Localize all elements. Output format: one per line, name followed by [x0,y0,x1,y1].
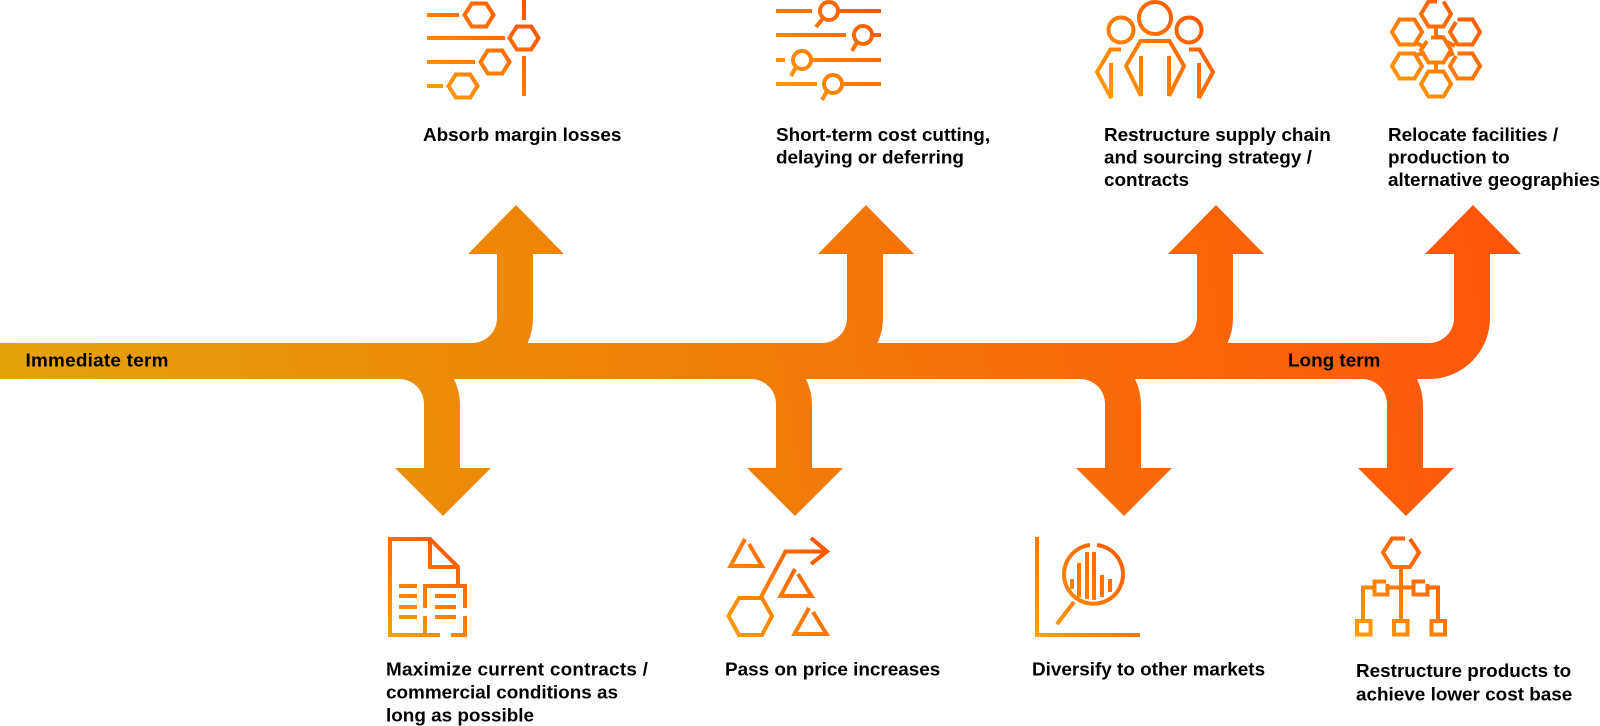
icon: triangles, hexagon and arrow [728,538,827,635]
icon: hexagon cluster [1392,2,1480,96]
strategy: maximize current contracts [386,539,649,726]
text: restructure products: achieve lower cost base [1356,684,1572,706]
icon: document [390,539,465,635]
icon: hexagon sliders [427,0,538,98]
text: maximize current contracts: Maximize current contracts / [386,660,649,680]
text: relocate facilities: Relocate facilities / [1388,125,1558,146]
timeline band with branching arrows [0,205,1521,516]
strategy: relocate facilities [1388,2,1600,191]
text: restructure supply chain: contracts [1104,170,1189,191]
strategy: restructure supply chain [1097,2,1331,191]
icon: magnifier sliders [776,2,881,100]
label: long term: Long term [1288,350,1380,372]
text: short-term cost cutting: delaying or deferring [776,148,964,168]
text: pass on price increases: Pass on price increases [725,660,940,680]
strategy: restructure products [1356,538,1572,706]
text: short-term cost cutting: Short-term cost cutting, [776,125,990,146]
strategy: diversify to other markets [1032,537,1265,680]
text: absorb margin losses: Absorb margin losses [423,125,621,146]
text: restructure supply chain: and sourcing strategy / [1104,148,1313,168]
text: diversify to other markets: Diversify to other markets [1032,660,1265,680]
icon: chart with magnifier [1037,537,1140,635]
strategy: short-term cost cutting [776,2,990,168]
text: maximize current contracts: commercial conditions as [386,682,618,704]
icon: three people [1097,2,1213,98]
strategy: pass on price increases [725,538,940,680]
text: relocate facilities: production to [1388,148,1510,168]
text: restructure supply chain: Restructure supply chain [1104,125,1331,146]
label: immediate term: Immediate term [26,350,169,372]
text: relocate facilities: alternative geographies [1388,170,1600,191]
strategy: absorb margin losses [423,0,621,146]
text: maximize current contracts: long as possible [386,706,534,726]
icon: hierarchy [1357,538,1445,634]
text: restructure products: Restructure products to [1356,661,1571,682]
